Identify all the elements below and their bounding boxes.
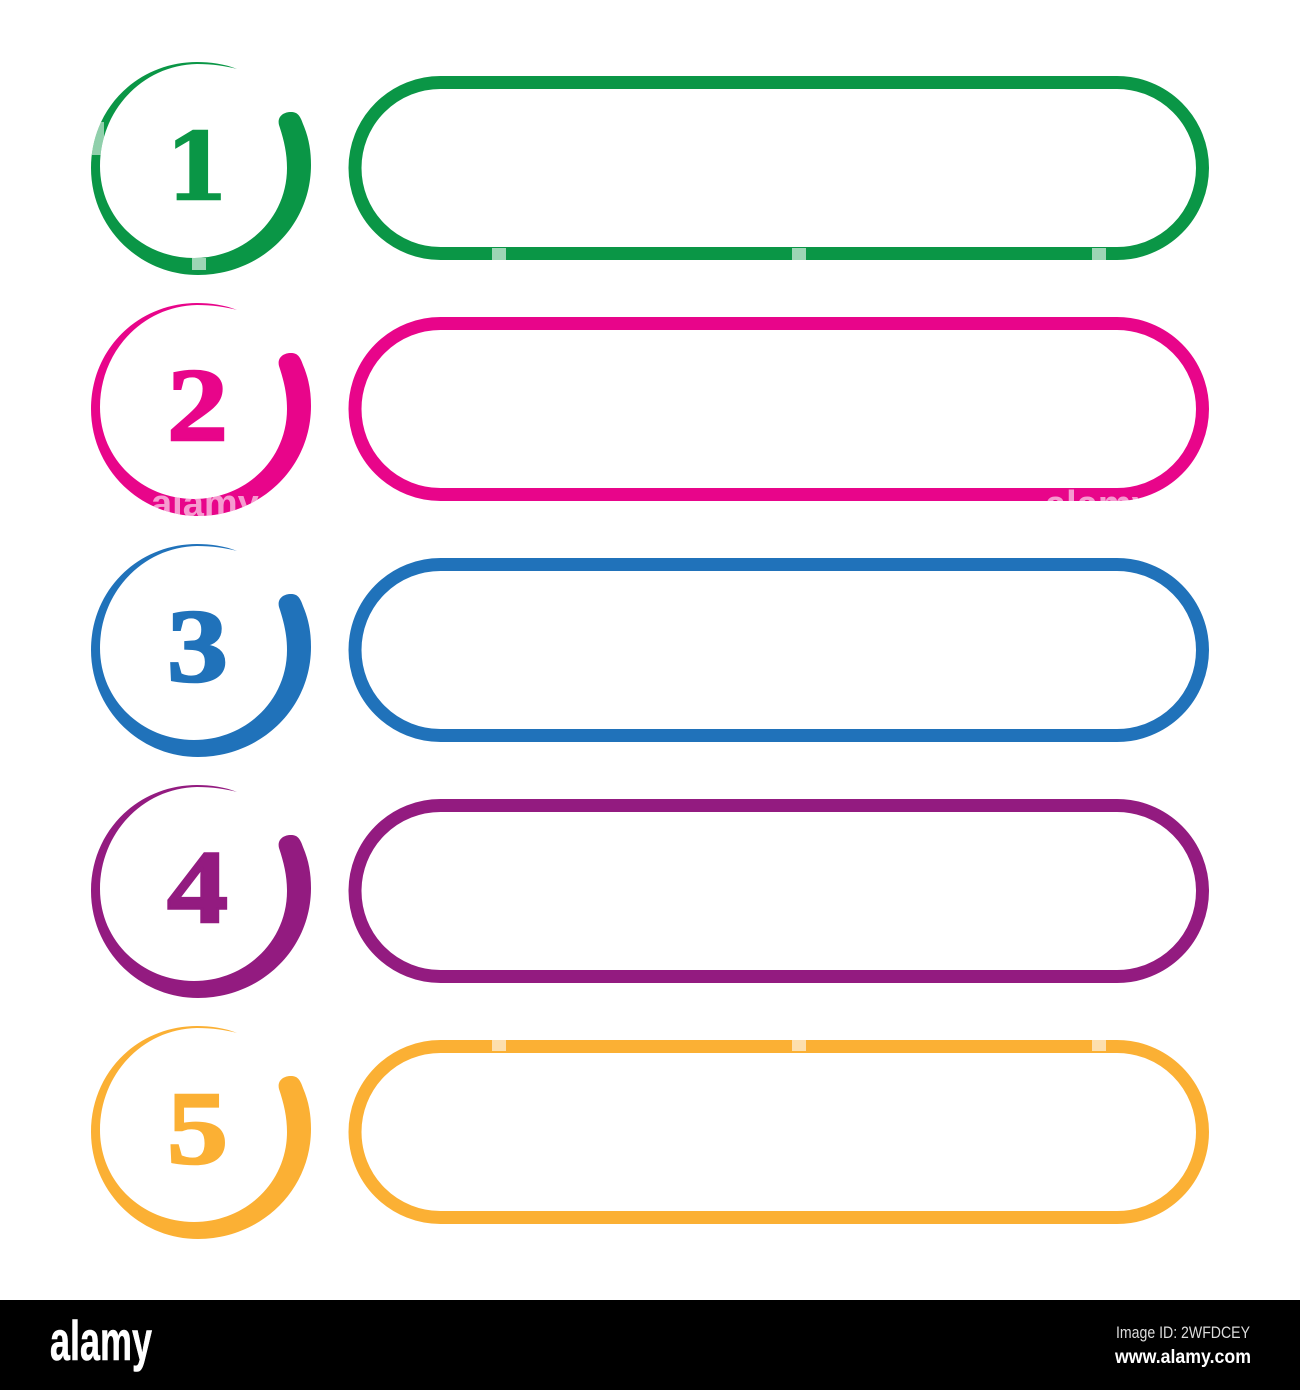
text box 4	[355, 806, 1202, 976]
icon: number 1 ring	[91, 62, 311, 275]
icon: number 4 ring	[91, 785, 311, 998]
row 2: magenta: alamy	[151, 483, 259, 525]
icon: number 3 ring	[91, 544, 311, 757]
number 2: 2	[167, 348, 228, 463]
row 3: blue	[91, 544, 1202, 757]
row 2: magenta: alamy	[1045, 484, 1153, 526]
footer bar	[0, 1300, 1300, 1390]
text box 2	[355, 324, 1202, 494]
number 3: 3	[167, 589, 228, 704]
website: www.alamy.com	[1114, 1347, 1251, 1368]
number 5: 5	[167, 1071, 228, 1186]
row 5: amber	[91, 1026, 1202, 1239]
text box 5	[355, 1046, 1202, 1218]
number 1: 1	[165, 112, 229, 222]
image id: Image ID: 2WFDCEY	[1116, 1323, 1250, 1342]
row 1: green	[91, 62, 1202, 275]
footer logo: alamy	[50, 1309, 152, 1372]
number 4: 4	[167, 830, 228, 945]
icon: number 5 ring	[91, 1026, 311, 1239]
row 4: purple	[91, 785, 1202, 998]
icon: number 2 ring	[91, 303, 311, 516]
text box 3	[355, 564, 1202, 736]
text box 1	[355, 82, 1202, 254]
row 2: magenta	[91, 303, 1202, 526]
